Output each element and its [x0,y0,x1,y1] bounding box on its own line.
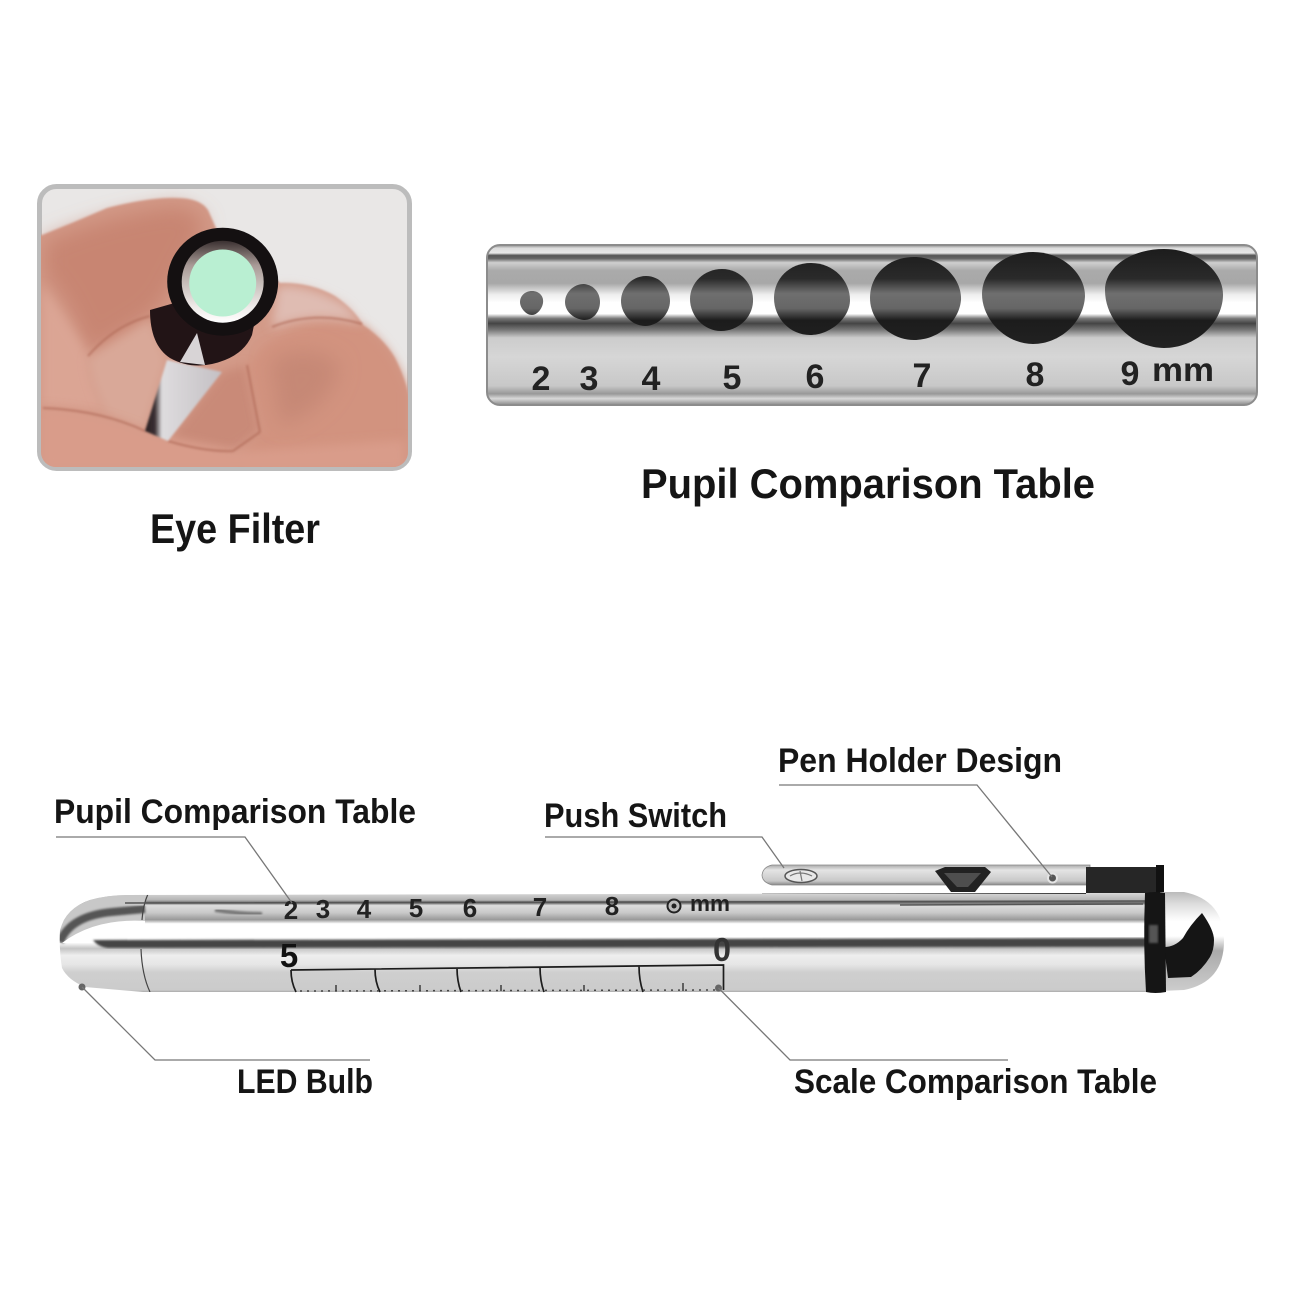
clip holder block [1086,867,1156,893]
filter ring [182,241,264,323]
pen end cap [167,228,278,336]
panel: pupil comparison table [487,245,1257,405]
green filter lens [189,250,256,316]
callout: Pen Holder Design: Pen Holder Design [778,742,1062,780]
scale numbers: mm [1152,351,1214,388]
pen shaft [145,360,222,441]
callout: LED Bulb: LED Bulb [237,1063,373,1101]
heading: Pupil Comparison Table: Pupil Comparison Table [641,460,1095,507]
scale numbers: 4 [642,360,661,398]
millimetre scale on barrel: 0 [713,931,731,968]
callout: Pupil Comparison Table [54,793,416,903]
pupil scale on barrel [284,891,730,925]
callout: Scale Comparison Table [715,984,1157,1101]
callout: Push Switch [544,797,784,868]
pupil circles 2 to 9 mm [520,249,1223,348]
diagram: pen light [58,865,1224,993]
scale numbers: 8 [1026,356,1044,394]
pupil scale on barrel: 7 [533,892,547,922]
scale numbers: 5 [723,359,741,397]
pupil scale on barrel: 8 [605,891,619,921]
pupil scale on barrel: 3 [316,894,330,924]
millimetre scale on barrel: 5 [280,937,298,974]
scale numbers: 9 [1121,355,1139,393]
millimetre scale on barrel [280,931,731,992]
clip latch [935,867,991,892]
callout: Pupil Comparison Table: Pupil Comparison Table [54,793,416,831]
scale numbers: 3 [580,360,598,398]
scale numbers: 7 [913,357,931,395]
photo: hand holding pen [30,198,410,470]
callout: Scale Comparison Table: Scale Comparison Table [794,1063,1157,1101]
scale numbers [532,351,1214,398]
callout: Push Switch: Push Switch [544,797,727,835]
scale numbers: 2 [532,360,550,398]
pupil scale on barrel: 5 [409,893,423,923]
callout: Pen Holder Design [778,742,1062,877]
heading: Eye Filter: Eye Filter [150,505,320,552]
pupil scale on barrel: 4 [357,894,372,924]
clip rivet [1047,872,1058,884]
callout: LED Bulb [78,984,373,1101]
black band [1144,892,1166,993]
pen black collar [150,304,254,366]
pupil scale on barrel: mm [690,891,730,916]
push switch oval [785,870,817,882]
pupil scale on barrel: 6 [463,893,477,923]
panel: eye filter photo [30,186,410,470]
pen end cap [1144,892,1224,993]
pupil scale on barrel: 2 [284,895,298,925]
infographic [37,184,1258,1100]
pen clip [762,865,1164,894]
pen barrel [58,891,1146,992]
scale numbers: 6 [806,358,824,396]
